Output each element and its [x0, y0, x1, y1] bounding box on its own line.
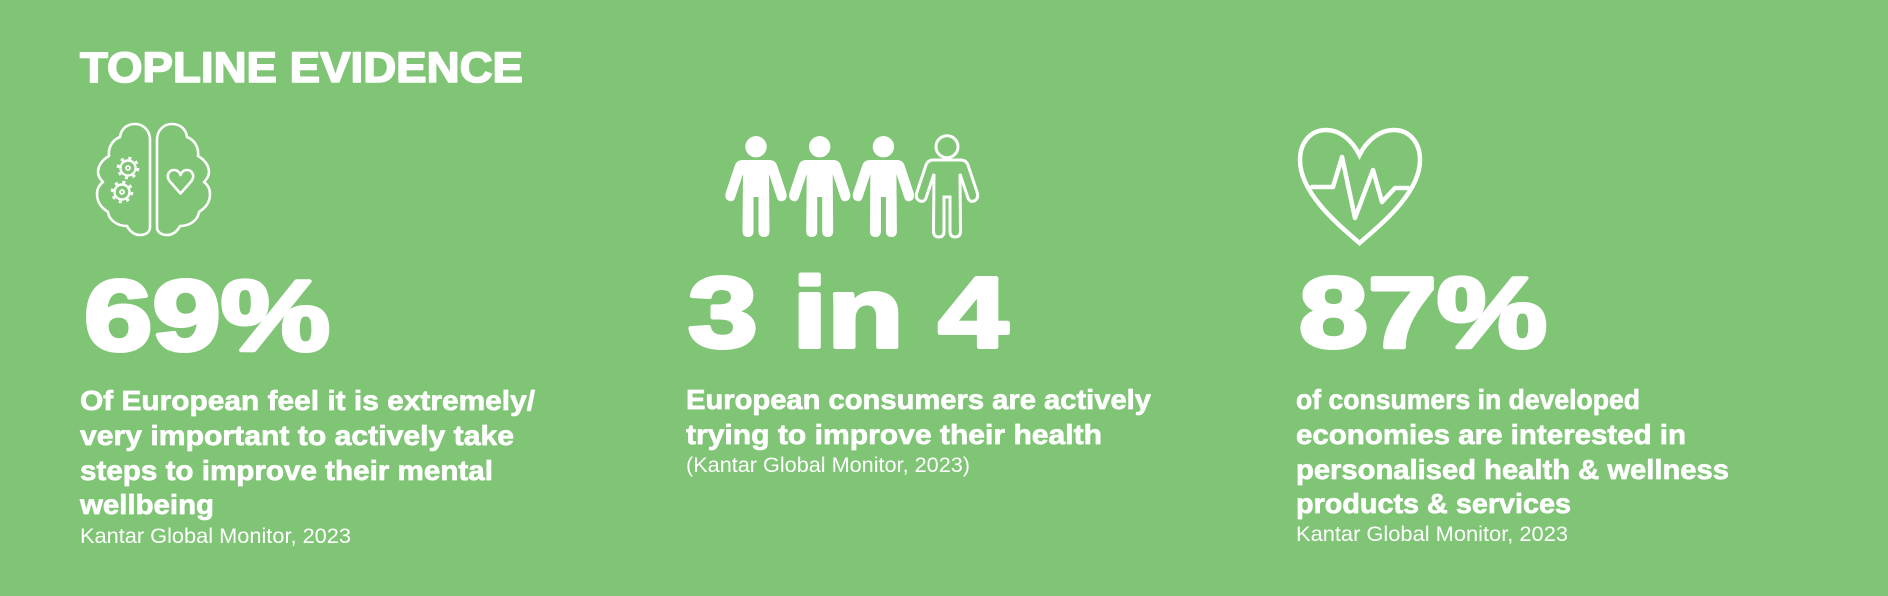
description	[79, 385, 535, 520]
description: economies are interested in	[1296, 419, 1686, 450]
icon: four people, three filled and one outlined	[725, 136, 978, 237]
description: wellbeing	[79, 489, 214, 520]
statistic: 3 in 4: 3 in 4	[688, 257, 1008, 369]
statistic: 69%: 69%	[84, 260, 330, 372]
description: very important to actively take	[80, 420, 514, 451]
description: European consumers are actively	[686, 384, 1151, 415]
panel: personalised health	[1296, 130, 1729, 546]
description: personalised health & wellness	[1296, 454, 1729, 485]
source: (Kantar Global Monitor, 2023)	[686, 454, 970, 477]
panel: improving health	[686, 136, 1151, 477]
panel: mental wellbeing	[79, 124, 535, 548]
icon: heart with pulse line	[1300, 130, 1420, 243]
description: Of European feel it is extremely/	[80, 385, 535, 416]
title: TOPLINE EVIDENCE	[80, 44, 523, 92]
icon: brain with gears and heart	[97, 124, 210, 235]
description: steps to improve their mental	[80, 455, 493, 486]
description: trying to improve their health	[686, 419, 1102, 450]
statistic: 87%: 87%	[1299, 257, 1547, 369]
source: Kantar Global Monitor, 2023	[80, 525, 351, 548]
description	[1296, 384, 1729, 519]
description	[686, 384, 1151, 450]
description: products & services	[1296, 488, 1571, 519]
description: of consumers in developed	[1296, 384, 1640, 415]
source: Kantar Global Monitor, 2023	[1296, 523, 1568, 546]
